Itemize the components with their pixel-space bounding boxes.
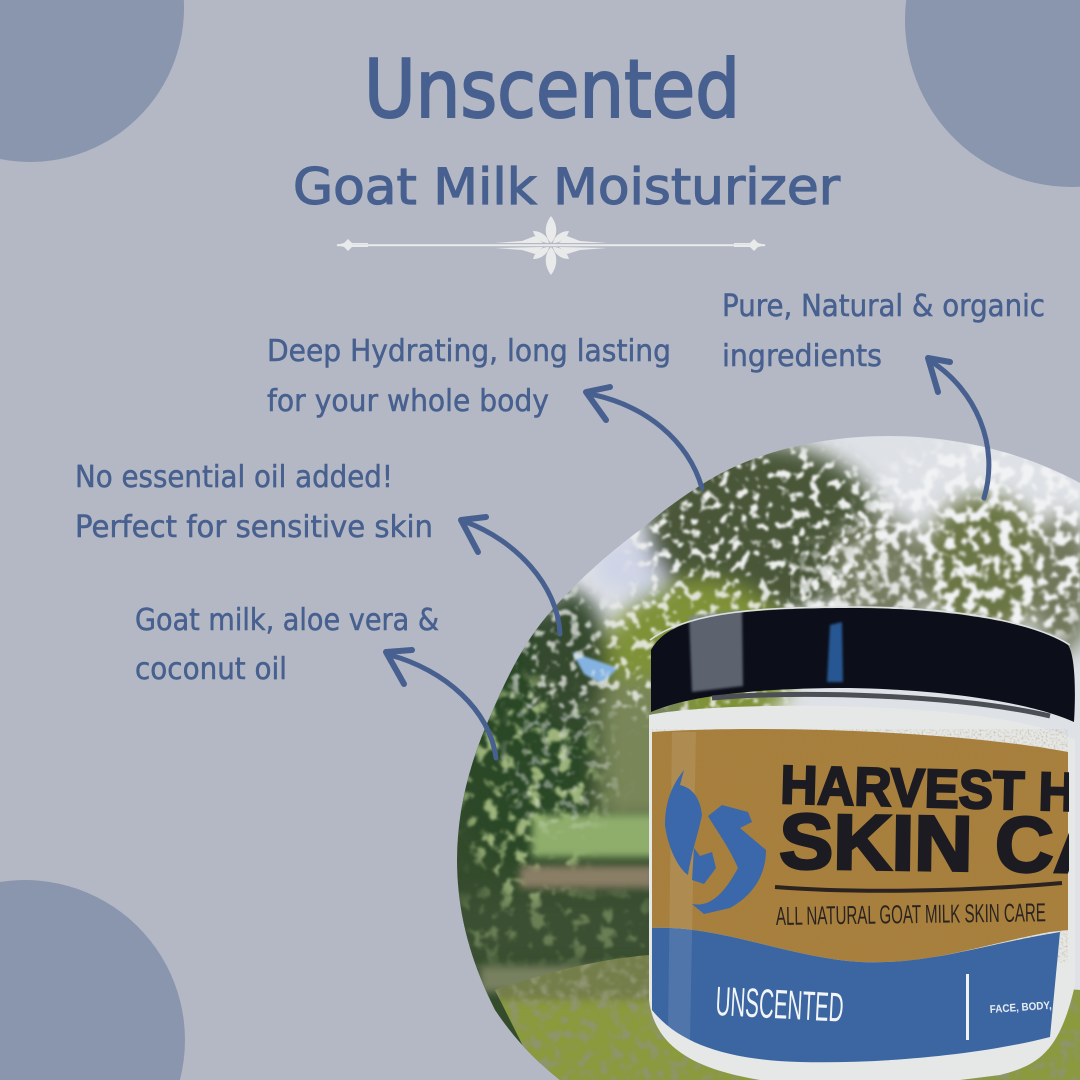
- mossy rock: [490, 950, 1080, 1080]
- callout: ingredients: [135, 603, 439, 687]
- callout: deep hydrating: [267, 334, 671, 419]
- product jar: [649, 607, 1080, 1080]
- subtitle: Goat Milk Moisturizer: [293, 158, 840, 216]
- callout: deep hydrating: Deep Hydrating, long lasting: [267, 334, 671, 369]
- blue label band: [652, 928, 1060, 1062]
- arrow: to deep hydrating: [586, 387, 702, 488]
- dappled light through leaves: [500, 440, 920, 840]
- variant label: UNSCENTED: [715, 978, 845, 1031]
- sky-blue patch: [572, 652, 618, 684]
- callout: deep hydrating: for your whole body: [267, 384, 549, 419]
- callout: pure natural: Pure, Natural & organic: [722, 289, 1045, 324]
- ornamental divider: [336, 216, 766, 275]
- callout: ingredients: coconut oil: [135, 652, 287, 687]
- soft tree masses: [445, 445, 1080, 965]
- sky: [440, 430, 1080, 1080]
- arrow: to pure natural: [928, 358, 989, 498]
- kraft label: [652, 729, 1068, 1062]
- decorative corner circle: top left: [0, 0, 184, 162]
- decorative corner circle: top right: [905, 0, 1080, 187]
- reflections: [668, 732, 696, 1040]
- meadow and field: [480, 815, 657, 992]
- callout: no essential oil: [75, 460, 433, 545]
- jar body: [649, 706, 1075, 1080]
- variant label: FACE, BODY,: [989, 1000, 1052, 1016]
- leaf mottling on dark tree: [458, 669, 649, 967]
- dark foreground base: [457, 690, 649, 1080]
- jar lid: [650, 607, 1075, 722]
- label logo: farm animals: [665, 770, 766, 914]
- brand name: [774, 764, 1069, 925]
- callout: pure natural: [722, 289, 1045, 374]
- callout: pure natural: ingredients: [722, 339, 882, 374]
- callout: no essential oil: Perfect for sensitive skin: [75, 510, 433, 545]
- arrow: to ingredients: [386, 650, 496, 758]
- decorative corner circle: bottom left: [0, 880, 185, 1080]
- title: Unscented: [364, 43, 740, 136]
- photo: trees and mossy rock in a round frame: [440, 430, 1080, 1080]
- arrow: to no essential oil: [461, 517, 560, 634]
- callout: no essential oil: No essential oil added!: [75, 460, 393, 495]
- callout: ingredients: Goat milk, aloe vera &: [135, 603, 439, 638]
- variant label: [715, 974, 1052, 1040]
